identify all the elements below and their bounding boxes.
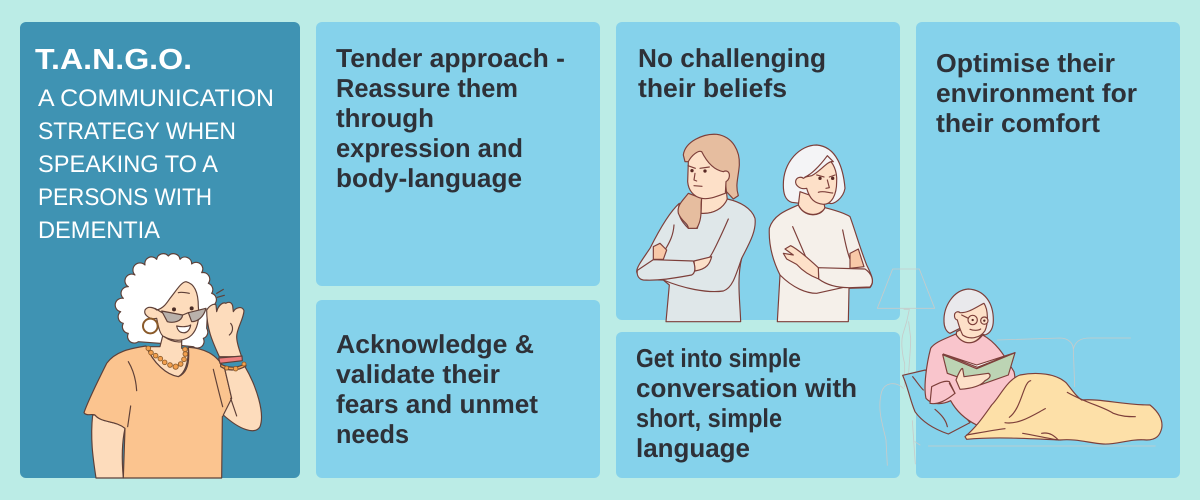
text block: subtitle: PERSONS WITH [38,184,212,211]
panel: tender approach: Reassure them [336,73,518,103]
text block: subtitle: DEMENTIA [38,217,160,244]
panel: acknowledge and validate: fears and unmet [336,389,538,419]
lamp and sofa outline [877,269,1155,465]
panel: no challenging [616,22,900,320]
panel: tender approach [316,22,600,286]
panel: no challenging: their beliefs [638,73,787,103]
panel: title [20,22,300,478]
text block: subtitle: A COMMUNICATION [38,85,274,112]
panel: no challenging: No challenging [638,43,826,73]
panel: optimise environment: Optimise their [936,48,1115,78]
panel: simple conversation: language [636,433,750,463]
panel: optimise environment: environment for [936,78,1137,108]
panel: simple conversation [616,332,900,478]
illustration: woman lowering sunglasses [84,254,261,478]
panel: tender approach: body-language [336,163,522,193]
panel: optimise environment: their comfort [936,108,1100,138]
panel: simple conversation: conversation with [636,373,857,403]
panel: simple conversation: Get into simple [636,343,801,373]
text block: subtitle: STRATEGY WHEN [38,118,236,145]
panel: acknowledge and validate: Acknowledge & [336,329,534,359]
illustration: two women with crossed arms [637,134,872,322]
panel: acknowledge and validate: validate their [336,359,500,389]
panel: acknowledge and validate [316,300,600,478]
panel: tender approach: Tender approach - [336,43,565,73]
figure: older woman [769,145,872,322]
panel: tender approach: expression and [336,133,523,163]
illustration: woman reading on a sofa [877,269,1162,465]
panel: optimise environment [916,22,1180,478]
heading: T.A.N.G.O.: T.A.N.G.O. [35,44,192,76]
panel: acknowledge and validate: needs [336,419,409,449]
panel: simple conversation: short, simple [636,403,782,433]
text block: subtitle: SPEAKING TO A [38,151,218,178]
text block: subtitle [38,85,274,244]
panel: tender approach: through [336,103,434,133]
figure: younger woman [637,134,755,322]
